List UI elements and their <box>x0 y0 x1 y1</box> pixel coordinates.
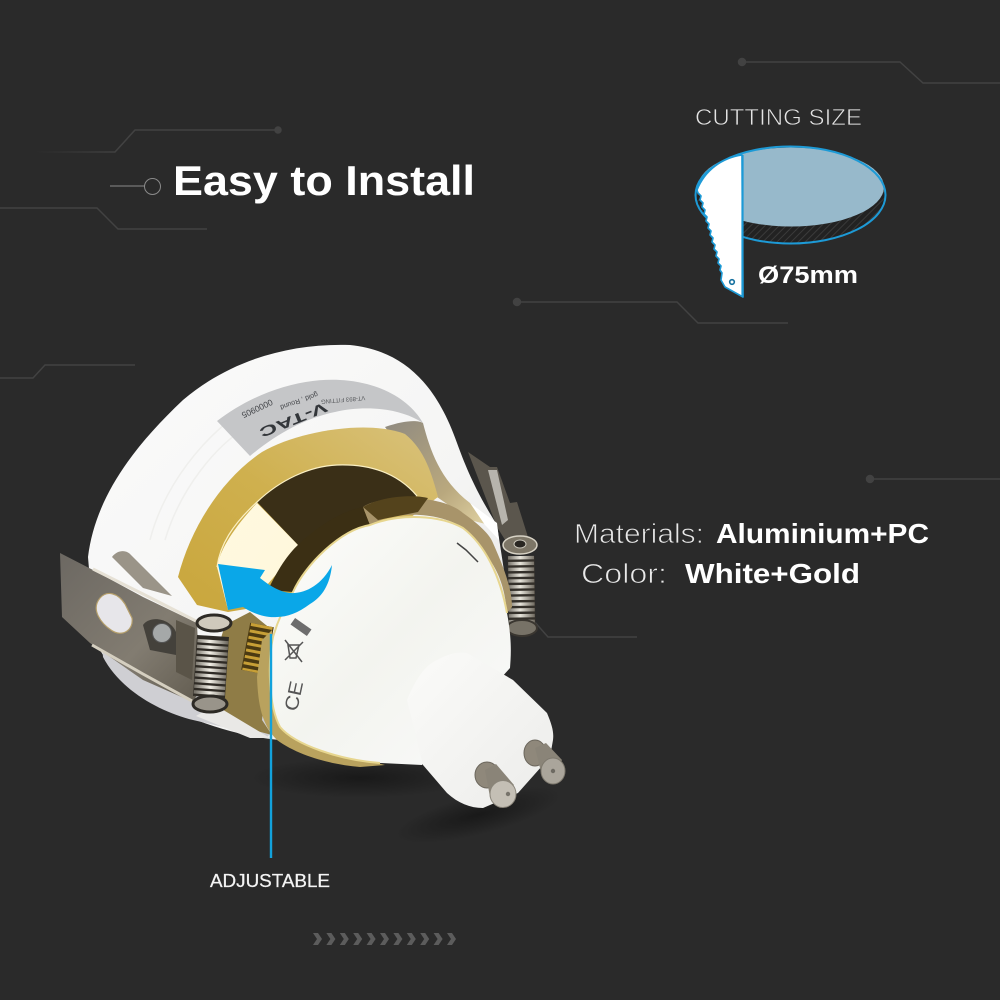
GU10 right pin <box>524 740 565 784</box>
front ring dark band <box>268 507 370 592</box>
gold coil <box>253 625 262 672</box>
right spring <box>521 556 522 628</box>
front ring dark top <box>363 496 428 520</box>
cutting size heading: CUTTING SIZE <box>695 104 862 130</box>
materials value: Aluminium+PC <box>716 518 929 549</box>
product label <box>217 380 423 456</box>
cutting size panel <box>695 104 886 297</box>
right clip <box>468 452 537 636</box>
product shadow <box>250 758 565 855</box>
leader line <box>270 634 272 858</box>
reflector bright area <box>217 503 300 610</box>
diameter label: Ø75mm <box>758 262 858 289</box>
color value: White+Gold <box>685 558 860 589</box>
background circuit lines <box>0 58 1000 637</box>
left spring <box>209 636 213 697</box>
GU10 left pin <box>475 762 516 808</box>
product label: gold , Round <box>279 390 319 410</box>
bulb ring highlight <box>270 517 507 763</box>
white housing <box>88 345 510 740</box>
product label: V-TAC <box>257 399 330 441</box>
title marker <box>110 178 160 194</box>
clip slot <box>96 593 132 633</box>
reflector dark area <box>257 465 417 547</box>
icon: saw blade <box>697 155 743 297</box>
clip rivet <box>143 619 176 655</box>
bulb markings <box>281 543 478 713</box>
lower ring and gold base <box>205 612 272 735</box>
housing lower shading <box>100 620 280 737</box>
chevron row <box>313 933 456 945</box>
title: Easy to Install <box>173 157 475 204</box>
housing bevel lines <box>150 395 270 540</box>
front ring tan band <box>363 498 512 613</box>
adjustable label: ADJUSTABLE <box>210 871 330 891</box>
bulb markings: CE <box>281 679 308 713</box>
materials label: Materials: <box>574 518 704 549</box>
product label: 0000905 <box>240 397 274 420</box>
product spec text <box>574 518 929 589</box>
product: downlight fitting <box>60 345 565 808</box>
product label: VT-893 FITTING <box>320 394 365 404</box>
inner shadow side <box>385 421 497 527</box>
GU10 neck <box>407 653 553 808</box>
gold inner edge <box>217 465 417 567</box>
color label: Color: <box>581 558 667 589</box>
hole diagram <box>696 146 886 244</box>
bulb body <box>270 517 511 765</box>
gold reflector ring <box>178 428 438 612</box>
left clip <box>60 551 231 712</box>
arrow: rotation <box>218 564 332 617</box>
